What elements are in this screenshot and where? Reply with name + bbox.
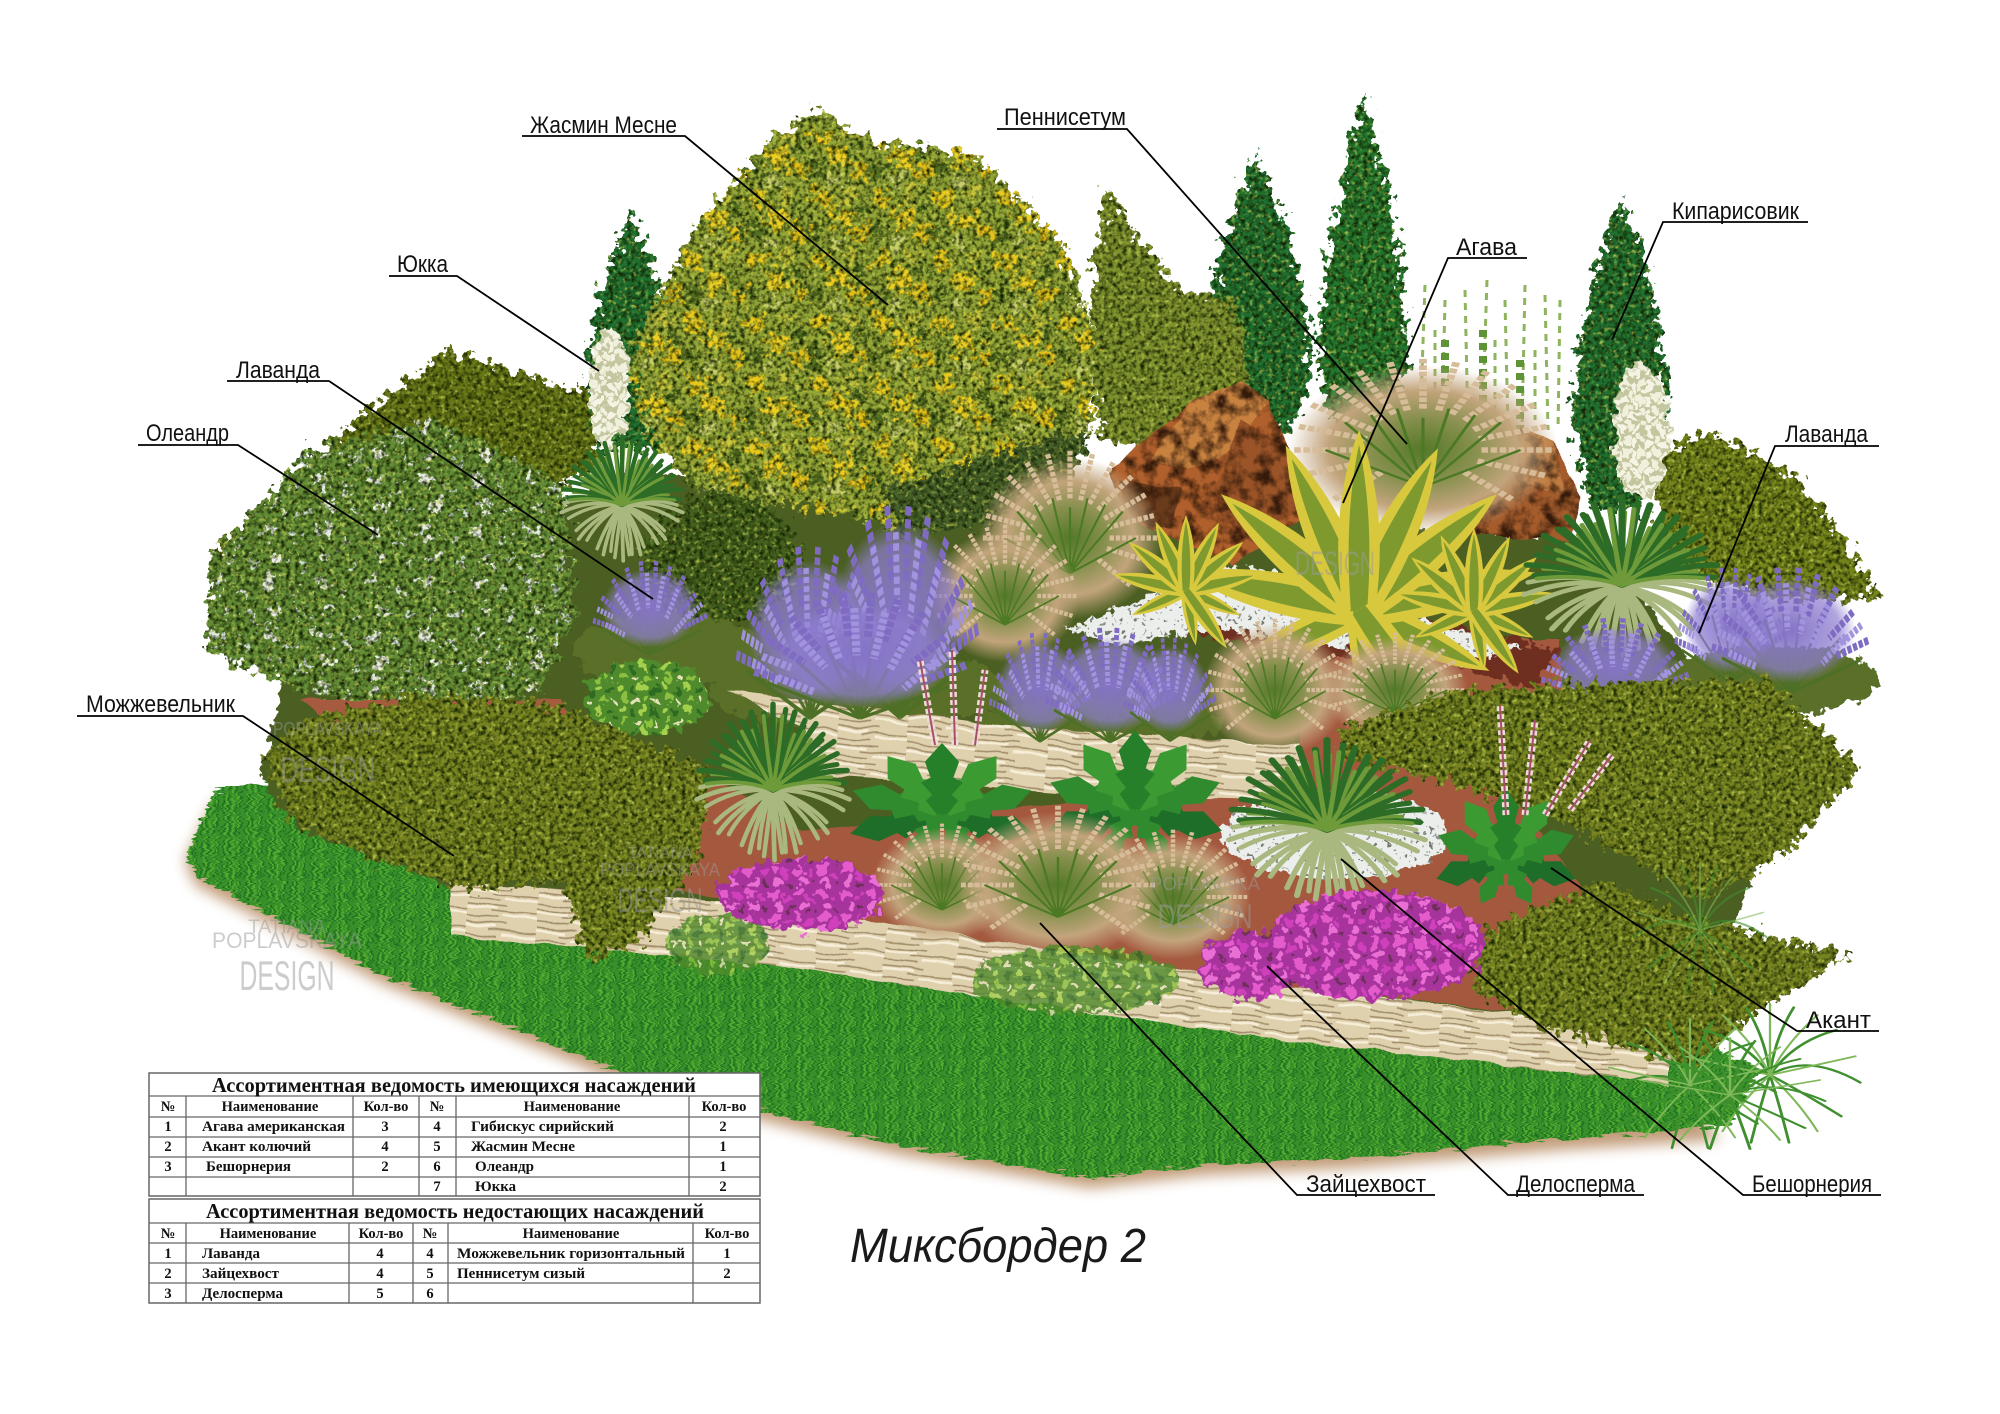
watermarks: TATIANA [248, 917, 326, 938]
table: existing plantings: 3 [164, 1159, 172, 1175]
table: missing plantings: Делосперма [202, 1286, 284, 1302]
small green shrub [585, 660, 709, 736]
table: existing plantings: 4 [433, 1119, 441, 1135]
table: existing plantings: Бешорнерия [206, 1159, 291, 1175]
label: Бешорнерия: Бешорнерия [1752, 1171, 1872, 1198]
fountain grass clumps upper left [930, 450, 1162, 662]
watermarks: DESIGN [1158, 898, 1252, 936]
fountain grass behind agave [1288, 358, 1558, 535]
yucca plants [557, 328, 1730, 664]
white pebble patch under front yucca [1220, 791, 1450, 879]
table: existing plantings: 5 [433, 1139, 441, 1155]
table: existing plantings: 4 [381, 1139, 389, 1155]
table: missing plantings: 5 [426, 1266, 434, 1282]
table: missing plantings: Кол-во [705, 1226, 749, 1242]
table: existing plantings: 3 [381, 1119, 389, 1135]
label: Акант [1551, 868, 1879, 1034]
watermarks: DESIGN [1295, 545, 1375, 583]
table: missing plantings: 1 [723, 1246, 731, 1262]
table: missing plantings: Лаванда [202, 1246, 261, 1262]
table: existing plantings: Кол-во [364, 1099, 408, 1115]
table: existing plantings: Наименование [222, 1099, 319, 1115]
table: existing plantings: 2 [719, 1179, 727, 1195]
watermarks: POPLAVSKAYA [600, 860, 720, 880]
label: Лаванда left: Лаванда [236, 357, 321, 384]
label: Юкка: Юкка [397, 251, 449, 278]
label: Кипарисовик [1612, 198, 1808, 340]
table: missing plantings: Ассортиментная ведомость недостающих насаждений [206, 1199, 704, 1223]
boulders [1110, 384, 1582, 566]
agave group [1111, 430, 1556, 761]
title: Миксбордер 2 [850, 1220, 1146, 1273]
table: missing plantings: № [423, 1226, 437, 1242]
table: missing plantings: 5 [376, 1286, 384, 1302]
table: missing plantings: Кол-во [359, 1226, 403, 1242]
table: existing plantings: Кол-во [702, 1099, 746, 1115]
lavender drifts [593, 506, 1868, 742]
table: existing plantings: Агава американская [202, 1119, 345, 1135]
label: Делосперма: Делосперма [1516, 1171, 1636, 1198]
table: existing plantings: № [430, 1099, 444, 1115]
label: Можжевельник: Можжевельник [86, 691, 235, 718]
acanthus plants [845, 730, 1580, 909]
trailing ivy [666, 915, 1180, 1014]
label: Жасмин Месне [522, 112, 888, 305]
table: existing plantings: Юкка [475, 1179, 517, 1195]
watermarks: POPLAVSKA [1150, 874, 1260, 894]
table: existing plantings: 2 [164, 1139, 172, 1155]
label: Кипарисовик: Кипарисовик [1672, 198, 1799, 225]
lawn grass [185, 780, 1760, 1188]
wispy sedge right corner [1604, 864, 1860, 1149]
table: existing plantings: 2 [381, 1159, 389, 1175]
lower stone wall [450, 880, 1670, 1085]
watermarks: DESIGN [240, 952, 334, 999]
table: existing plantings: Олеандр [475, 1159, 534, 1175]
table: existing plantings: Наименование [524, 1099, 621, 1115]
table: existing plantings: 6 [433, 1159, 441, 1175]
label: Зайцехвост [1040, 923, 1435, 1198]
fountain grass clumps front [871, 805, 1251, 960]
table: existing plantings: 7 [433, 1179, 441, 1195]
table: missing plantings: Можжевельник горизонтальный [457, 1246, 685, 1262]
watermarks: DESIGN [280, 749, 376, 790]
table: missing plantings: 2 [164, 1266, 172, 1282]
table: existing plantings: Ассортиментная ведомость имеющихся насаждений [212, 1073, 696, 1097]
delosperma pink [715, 859, 1485, 1000]
table: existing plantings: 1 [719, 1139, 727, 1155]
label: Олеандр [138, 420, 378, 535]
table: missing plantings: № [161, 1226, 175, 1242]
table: existing plantings: 1 [164, 1119, 172, 1135]
table: missing plantings: Зайцехвост [202, 1266, 279, 1282]
table: missing plantings: 2 [723, 1266, 731, 1282]
label: Лаванда right: Лаванда [1785, 421, 1869, 448]
watermarks: DESIGN [618, 882, 702, 920]
watermarks: TATIANA [627, 845, 693, 862]
table: missing plantings: 4 [376, 1266, 384, 1282]
label: Пеннисетум: Пеннисетум [1004, 104, 1126, 131]
rear junipers [210, 350, 1880, 626]
table: missing plantings: Наименование [523, 1226, 620, 1242]
label: Пеннисетум [997, 104, 1407, 444]
table: missing plantings: 1 [164, 1246, 172, 1262]
fountain grass clumps upper tier [1202, 618, 1468, 756]
table: missing plantings: 3 [164, 1286, 172, 1302]
table: missing plantings [149, 1199, 760, 1303]
table: existing plantings: 2 [719, 1119, 727, 1135]
table: missing plantings: Пеннисетум сизый [457, 1266, 585, 1282]
table: missing plantings: 4 [426, 1246, 434, 1262]
table: existing plantings: 1 [719, 1159, 727, 1175]
label: Зайцехвост: Зайцехвост [1306, 1171, 1426, 1198]
table: missing plantings: 4 [376, 1246, 384, 1262]
label: Делосперма [1267, 966, 1644, 1198]
table: missing plantings: 6 [426, 1286, 434, 1302]
watermarks: POPLAVSKAYA [212, 928, 362, 953]
table: existing plantings: № [161, 1099, 175, 1115]
label: Юкка [389, 251, 599, 371]
watermarks: POPLAVSKAYA [273, 719, 383, 739]
label: Олеандр: Олеандр [146, 420, 229, 447]
upper stone wall [725, 690, 1310, 800]
front junipers [265, 680, 1860, 1065]
label: Жасмин Месне: Жасмин Месне [530, 112, 677, 139]
label: Агава: Агава [1456, 234, 1518, 261]
table: existing plantings: Жасмин Месне [471, 1139, 576, 1155]
yellow flowering shrub: Жасмин Месне [628, 109, 1096, 535]
olive ground cover under lavender [572, 614, 1880, 746]
label: Акант: Акант [1806, 1007, 1871, 1034]
oleander [205, 420, 575, 720]
vine thread plant [1420, 280, 1560, 430]
label: Можжевельник [77, 691, 454, 856]
table: missing plantings: Наименование [220, 1226, 317, 1242]
acanthus flower spikes [920, 650, 1612, 815]
white pebble mound [1063, 566, 1560, 690]
background conifers [588, 92, 1666, 510]
label: Бешорнерия [1341, 859, 1881, 1198]
table: existing plantings [149, 1073, 760, 1196]
table: existing plantings: Гибискус сирийский [471, 1119, 614, 1135]
terracotta soil beds [300, 640, 1690, 1030]
label: Лаванда left [227, 357, 653, 599]
label: Лаванда right [1699, 421, 1879, 633]
interior planting underlay [260, 470, 1780, 1040]
label: Агава [1343, 234, 1527, 503]
watermarks [212, 545, 1375, 999]
table: existing plantings: Акант колючий [202, 1139, 311, 1155]
yucca plants front [691, 698, 1435, 911]
